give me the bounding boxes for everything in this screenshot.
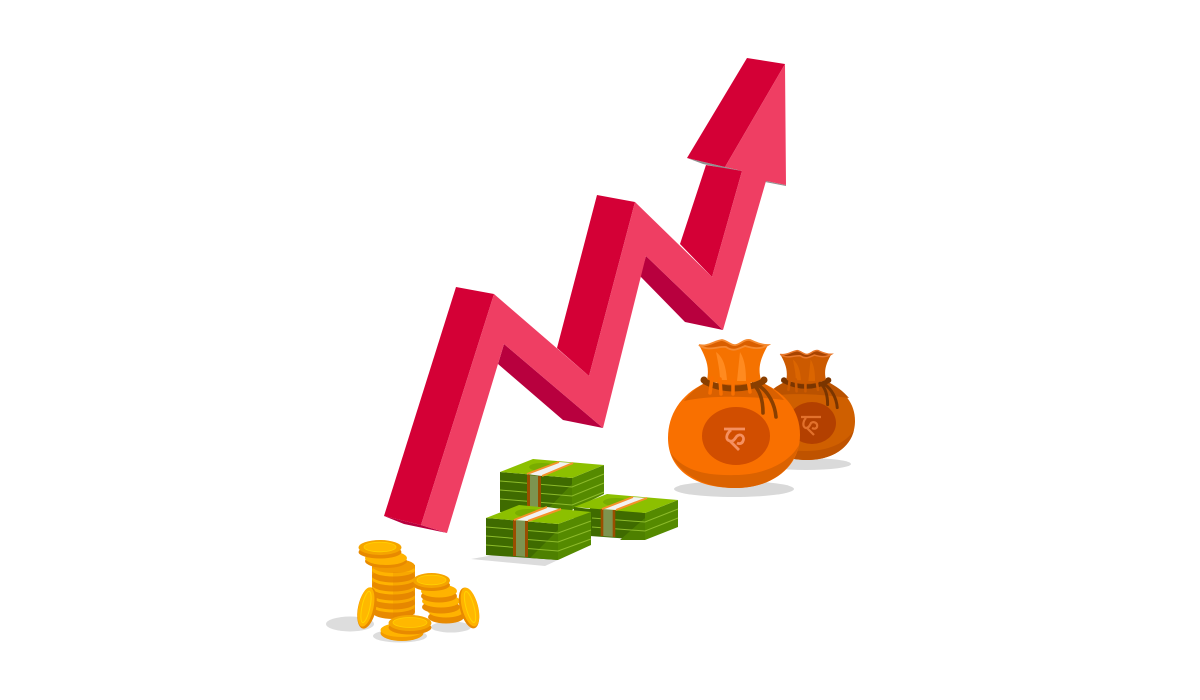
coins: tall stack <box>358 540 415 619</box>
cash: front bundle <box>471 505 591 566</box>
coin: leaning left <box>354 586 380 630</box>
cash: back bundle <box>500 459 604 512</box>
coins: flat pair <box>380 615 432 641</box>
icon: rupee mark, small bag <box>801 417 821 435</box>
arrow: rising zig-zag <box>384 58 786 533</box>
bag: small rupee sack (back) <box>757 351 855 470</box>
coins: shadows <box>326 616 471 642</box>
cash: right bundle <box>574 494 678 540</box>
coin: leaning right <box>455 585 483 631</box>
coins: short stack <box>413 573 464 624</box>
bag: large rupee sack (front) <box>668 340 800 497</box>
icon: rupee mark, large bag <box>724 429 745 450</box>
